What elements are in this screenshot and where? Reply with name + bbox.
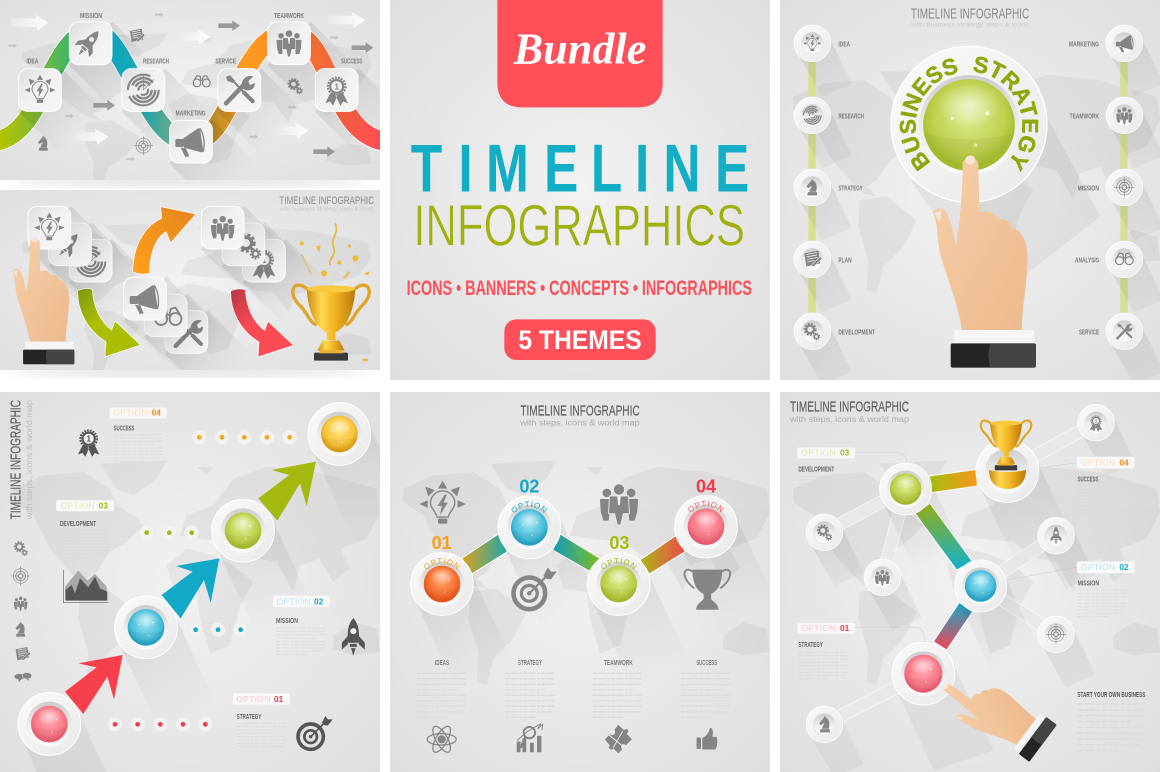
step labels: MISSION — [80, 13, 102, 20]
step numbers: 02 — [519, 476, 539, 496]
ribbon connectors — [462, 534, 685, 574]
hand — [13, 237, 74, 364]
step labels: TEAMWORK — [274, 13, 304, 20]
left step icons — [794, 25, 852, 385]
step labels — [26, 13, 363, 117]
step labels: SUCCESS — [341, 59, 363, 66]
right labels: SERVICE — [1079, 329, 1099, 336]
title: with business strategy steps & icons — [910, 22, 1030, 29]
panel: cover — [390, 0, 770, 380]
curved option labels: OPTION — [688, 500, 724, 512]
title — [789, 400, 909, 424]
option 02: OPTION — [1081, 562, 1115, 572]
title: TIMELINE INFOGRAPHIC — [911, 7, 1029, 23]
sphere nodes — [880, 440, 1078, 770]
column labels: STRATEGY — [518, 660, 542, 667]
option 02: OPTION — [277, 596, 311, 606]
option 03: DEVELOPMENT — [60, 521, 96, 528]
option 03 — [797, 447, 855, 503]
option 02 — [1077, 561, 1135, 617]
column labels: IDEAS — [435, 660, 449, 667]
option 04: 04 — [152, 408, 161, 418]
left labels: DEVELOPMENT — [838, 329, 875, 336]
right green connectors — [1120, 62, 1128, 313]
bundle tab: Bundle — [513, 24, 646, 73]
step numbers — [432, 476, 716, 553]
tiles group one — [28, 206, 162, 332]
option 02: MISSION — [1078, 580, 1099, 587]
option 04: OPTION — [113, 408, 147, 418]
panel: curved arrows theme — [0, 190, 380, 404]
option 01: STRATEGY — [237, 714, 262, 721]
title: TIMELINE INFOGRAPHIC — [790, 400, 909, 416]
option 01: OPTION — [236, 694, 270, 704]
title — [279, 195, 374, 213]
left labels: STRATEGY — [838, 185, 863, 192]
left green connectors — [808, 62, 816, 313]
left labels — [838, 41, 875, 336]
ribbon segments — [915, 469, 977, 650]
start your own business note — [1077, 692, 1146, 751]
option 04: SUCCESS — [1078, 476, 1099, 483]
gold trophy — [293, 285, 369, 361]
option 02 — [273, 595, 365, 656]
title — [519, 403, 640, 427]
option 01 — [797, 623, 855, 679]
title: with steps, icons & world map — [24, 400, 34, 520]
column labels: SUCCESS — [696, 660, 717, 667]
option 03: 03 — [99, 500, 108, 510]
step labels: IDEA — [26, 59, 38, 66]
option 02: 02 — [1119, 562, 1129, 572]
panel: rising arrows theme — [0, 28, 380, 772]
paper arrows — [11, 12, 365, 145]
option 01: 01 — [274, 694, 284, 704]
arrow: green step — [258, 462, 316, 521]
small scattered icons — [38, 29, 302, 155]
large icons — [419, 481, 730, 610]
right step icons — [1106, 25, 1160, 385]
panel: branching network theme — [780, 392, 1160, 772]
step labels: SERVICE — [215, 59, 236, 66]
right labels: MARKETING — [1069, 41, 1099, 48]
option 02: MISSION — [276, 618, 298, 625]
themes pill — [504, 319, 656, 360]
option 04 — [78, 407, 167, 461]
panel: zigzag timeline theme — [390, 392, 770, 772]
right labels: MISSION — [1078, 185, 1099, 192]
sphere discs — [18, 403, 410, 772]
heading: timeline: TIMELINE — [411, 131, 749, 206]
option 04 — [1077, 457, 1135, 513]
left icon column — [11, 542, 32, 682]
area chart — [63, 570, 108, 603]
option 03: OPTION — [801, 448, 835, 458]
option 04: SUCCESS — [114, 426, 135, 433]
themes pill: 5 THEMES — [518, 325, 642, 355]
step numbers: 03 — [609, 533, 629, 553]
arrow: red step — [65, 655, 123, 714]
bottom icons — [427, 724, 717, 755]
step labels: RESEARCH — [143, 59, 169, 66]
option 01: OPTION — [801, 623, 835, 633]
arrow: red — [231, 289, 294, 357]
hand pressing button — [933, 155, 1036, 368]
column labels — [435, 660, 717, 667]
left labels: RESEARCH — [838, 113, 864, 120]
sphere steps — [411, 495, 776, 687]
title: TIMELINE INFOGRAPHIC — [520, 403, 640, 419]
panel: wave timeline theme — [0, 0, 408, 213]
branch connectors — [824, 423, 1096, 724]
curved option labels: OPTION — [424, 558, 460, 570]
option 02: 02 — [314, 596, 324, 606]
main button — [891, 46, 1100, 300]
title: with steps, icons & world map — [519, 417, 640, 427]
left labels: IDEA — [838, 41, 850, 48]
title — [9, 400, 34, 520]
tag leader lines — [855, 452, 1077, 643]
bundle tab — [497, 0, 663, 107]
arrow: orange — [133, 207, 196, 274]
grey arrows — [8, 13, 373, 161]
option 01: STRATEGY — [798, 642, 823, 649]
step numbers: 04 — [696, 476, 716, 496]
body copy lines — [417, 673, 731, 717]
right labels — [1069, 41, 1099, 336]
pointing hand — [932, 656, 1057, 769]
option 03 — [56, 500, 114, 557]
arrow: blue step — [162, 558, 219, 618]
small icon nodes — [806, 404, 1135, 772]
curved option labels — [424, 500, 724, 570]
option 01: 01 — [840, 623, 850, 633]
title: with business strategy steps & icons — [280, 207, 374, 213]
right labels: TEAMWORK — [1070, 113, 1099, 120]
panel: business strategy theme — [780, 0, 1160, 380]
option 03: 03 — [840, 448, 850, 458]
dot rows — [108, 430, 297, 732]
column labels: TEAMWORK — [604, 660, 633, 667]
title: with steps, icons & world map — [789, 414, 909, 424]
tiles group three — [123, 277, 258, 404]
step tiles — [18, 22, 408, 213]
option 03: DEVELOPMENT — [798, 467, 835, 474]
wave ribbon — [0, 32, 387, 142]
option 04: OPTION — [1081, 457, 1115, 467]
right labels: ANALYSIS — [1075, 257, 1099, 264]
step numbers: 01 — [432, 533, 452, 553]
option 04: 04 — [1119, 457, 1129, 467]
left labels: PLAN — [838, 257, 852, 264]
trophy node — [981, 421, 1031, 489]
tiles group two — [201, 206, 336, 332]
option 03: OPTION — [61, 500, 95, 510]
title — [910, 7, 1030, 29]
curved option labels: OPTION — [512, 501, 548, 513]
step labels: MARKETING — [176, 110, 206, 117]
arc text: BUSINESS STRATEGY — [900, 56, 1038, 172]
confetti — [300, 223, 370, 361]
option 01 — [233, 693, 333, 750]
curved option labels: OPTION — [601, 558, 637, 570]
arrow: green — [78, 289, 141, 357]
